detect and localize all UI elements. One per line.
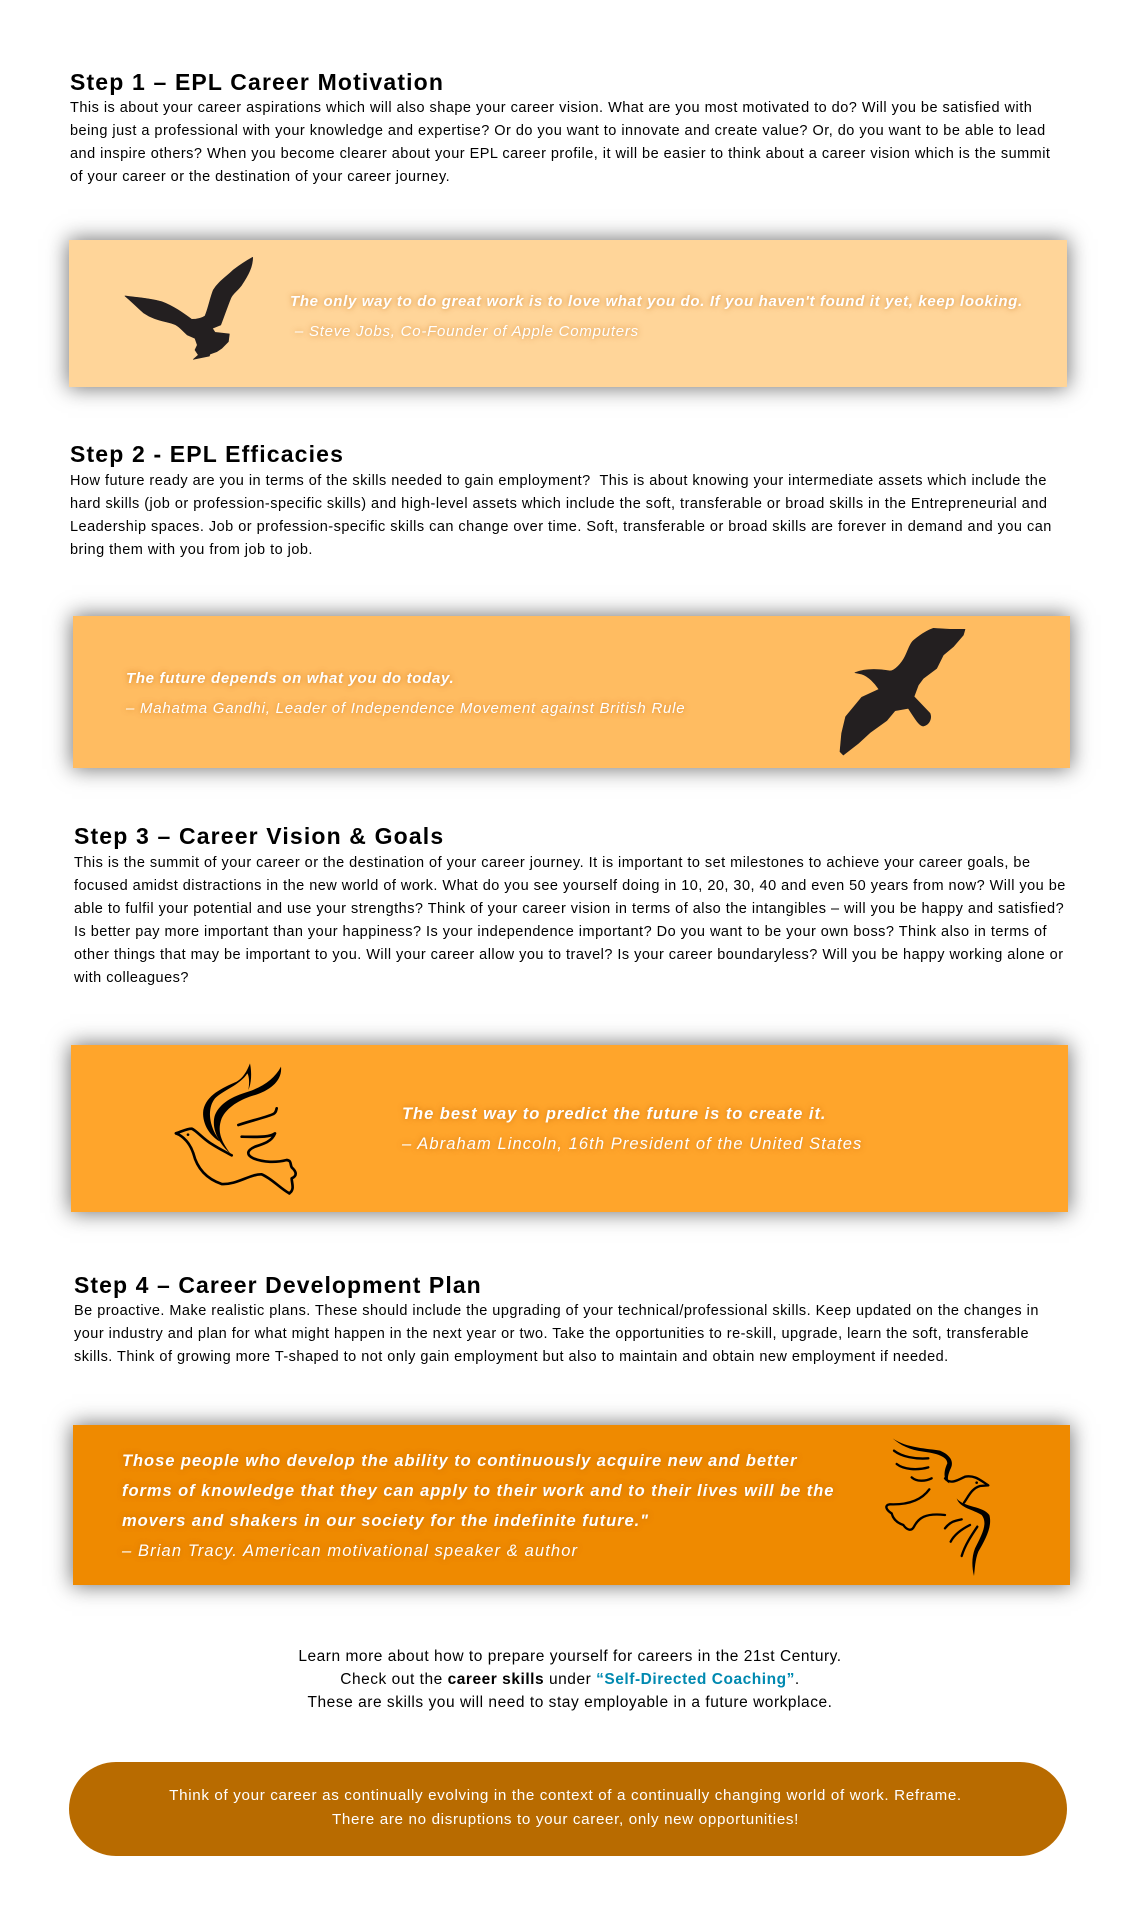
text: step 2 body: Leadership spaces. Job or profession-specific skills can change over time. Soft, transferable or broad skills are forever in demand and you can: [70, 519, 1052, 535]
panel: quote 3: [71, 1045, 1068, 1212]
quote: Lincoln: The best way to predict the future is to create it.: [402, 1105, 826, 1123]
quote: Brian Tracy: forms of knowledge that they can apply to their work and to their lives will be the: [122, 1482, 834, 1500]
callout: closing pill: Think of your career as continually evolving in the context of a continually changing world of work. Reframe.: [169, 1787, 962, 1804]
quote: Steve Jobs: – Steve Jobs, Co-Founder of Apple Computers: [295, 323, 639, 340]
panel: quote 2: [73, 616, 1070, 768]
text: step 4 body: your industry and plan for what might happen in the next year or two. Take the opportunities to re-skill, upgrade, learn the soft, transferable: [74, 1326, 1029, 1342]
quote: Steve Jobs: [290, 292, 1023, 340]
text: step 3 body: Is better pay more important than your happiness? Is your independence important? Do you want to be your own boss? Think also in terms of: [74, 924, 1047, 940]
heading: step 2: Step 2 - EPL Efficacies: [70, 441, 344, 467]
heading: step 4: Step 4 – Career Development Plan: [74, 1272, 482, 1298]
text: step 1 body: of your career or the destination of your career journey.: [70, 169, 450, 185]
quote: Brian Tracy: movers and shakers in our society for the indefinite future.": [122, 1512, 649, 1530]
text: step 1 body: and inspire others? When you become clearer about your EPL career profile, it will be easier to think about a career vision which is the summit: [70, 146, 1050, 162]
panel: quote 4: [73, 1425, 1070, 1585]
icon: bird silhouette 1: [124, 257, 253, 360]
quote: Gandhi: – Mahatma Gandhi, Leader of Independence Movement against British Rule: [126, 700, 685, 717]
panel: quote 1: [69, 240, 1067, 387]
text: step 2 body: How future ready are you in terms of the skills needed to gain employment? This is about knowing your intermediate assets which include the: [70, 473, 1047, 489]
text: step 2 body: hard skills (job or profession-specific skills) and high-level assets which include the soft, transferable or broad skills in the Entrepreneurial and: [70, 496, 1047, 512]
text: step 4 body: [74, 1303, 1039, 1365]
text: step 3 body: [74, 855, 1066, 986]
text: step 1 body: This is about your career aspirations which will also shape your career vision. What are you most motivated to do? Will you be satisfied with: [70, 100, 1032, 116]
quote: Brian Tracy: Those people who develop the ability to continuously acquire new and better: [122, 1452, 797, 1470]
heading: step 1: Step 1 – EPL Career Motivation: [70, 69, 444, 95]
text: step 1 body: [70, 100, 1050, 185]
callout: closing pill: There are no disruptions to your career, only new opportunities!: [332, 1811, 799, 1828]
text: learn more: These are skills you will need to stay employable in a future workplace.: [308, 1694, 832, 1711]
text: step 4 body: skills. Think of growing more T-shaped to not only gain employment but also to maintain and obtain new employment if needed.: [74, 1349, 949, 1365]
text: step 3 body: with colleagues?: [74, 970, 189, 986]
text: step 3 body: other things that may be important to you. Will your career allow you to travel? Is your career boundaryless? Will you be happy working alone or: [74, 947, 1064, 963]
quote: Lincoln: [402, 1105, 862, 1153]
text: learn more: Check out the career skills under “Self-Directed Coaching”.: [340, 1671, 800, 1688]
text: step 4 body: Be proactive. Make realistic plans. These should include the upgrading of your technical/professional skills. Keep updated on the changes in: [74, 1303, 1039, 1319]
quote: Steve Jobs: The only way to do great work is to love what you do. If you haven't found it yet, keep looking.: [290, 293, 1023, 310]
text: learn more: Learn more about how to prepare yourself for careers in the 21st Century.: [298, 1648, 842, 1665]
icon: dove outline 1: [174, 1064, 297, 1195]
text: step 3 body: focused amidst distractions in the new world of work. What do you see yourself doing in 10, 20, 30, 40 and even 50 years from now? Will you be: [74, 878, 1066, 894]
icon: bird silhouette 2: [840, 628, 966, 756]
callout: closing pill: [69, 1762, 1067, 1856]
quote: Brian Tracy: – Brian Tracy. American motivational speaker & author: [122, 1542, 578, 1560]
text: step 2 body: [70, 473, 1052, 558]
quote: Gandhi: The future depends on what you do today.: [126, 670, 454, 687]
text: step 3 body: able to fulfil your potential and use your strengths? Think of your career vision in terms of also the intangibles – will you be happy and satisfied?: [74, 901, 1064, 917]
text: step 1 body: being just a professional with your knowledge and expertise? Or do you want to innovate and create value? Or, do you want to be able to lead: [70, 123, 1046, 139]
text: step 3 body: This is the summit of your career or the destination of your career journey. It is important to set milestones to achieve your career goals, be: [74, 855, 1031, 871]
text: step 2 body: bring them with you from job to job.: [70, 542, 313, 558]
quote: Brian Tracy: [122, 1452, 834, 1560]
icon: dove outline 2: [885, 1438, 990, 1576]
quote: Gandhi: [126, 670, 685, 718]
heading: step 3: Step 3 – Career Vision & Goals: [74, 823, 444, 849]
text: learn more: [298, 1648, 842, 1711]
quote: Lincoln: – Abraham Lincoln, 16th President of the United States: [402, 1135, 862, 1153]
